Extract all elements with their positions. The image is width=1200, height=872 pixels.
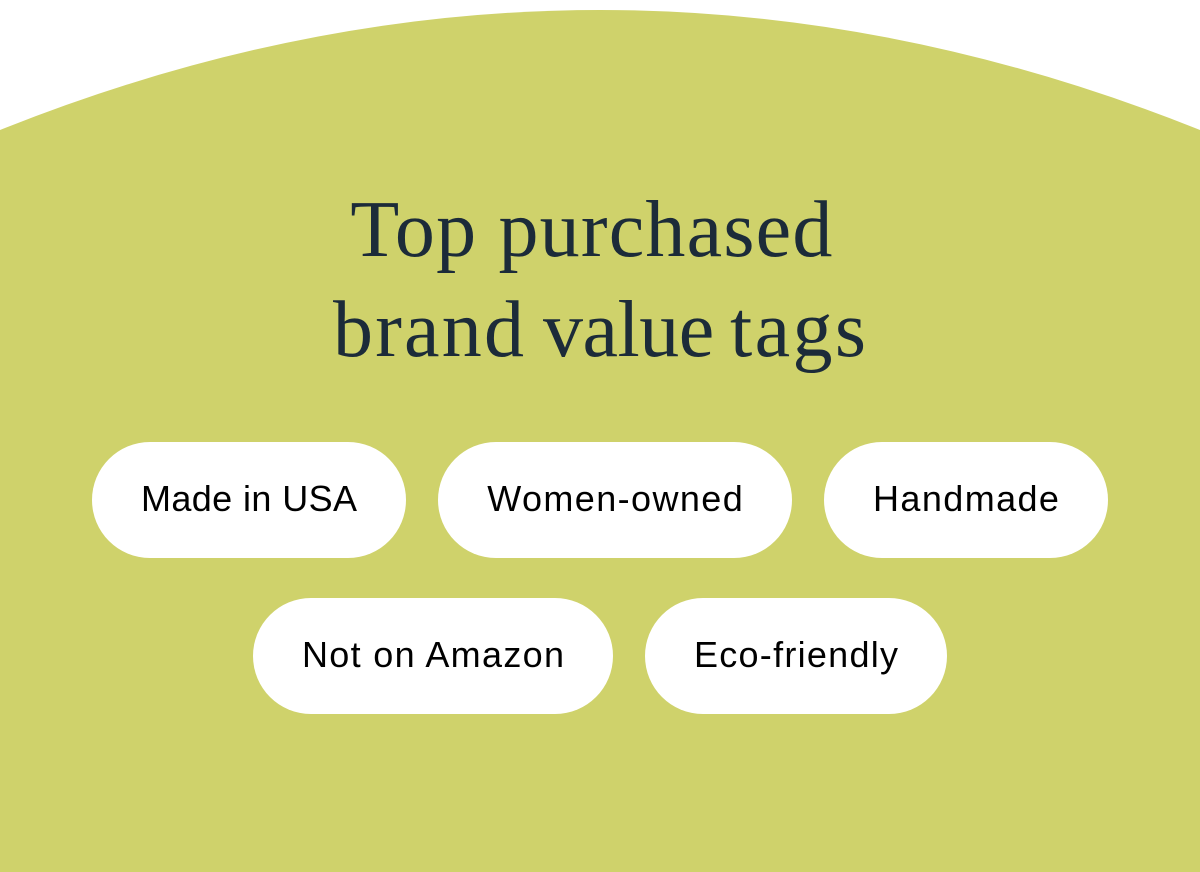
tag: Handmade: Handmade <box>873 478 1060 519</box>
tag: Not on Amazon <box>253 598 613 714</box>
tag: Handmade <box>824 442 1108 558</box>
tag: Not on Amazon: Not on Amazon <box>302 634 565 675</box>
heading: Top purchased <box>350 186 834 274</box>
tag: Eco-friendly: Eco-friendly <box>694 634 899 675</box>
heading: brand <box>333 286 526 374</box>
tag: Eco-friendly <box>645 598 947 714</box>
tag: Made in USA <box>92 442 406 558</box>
tag: Women-owned <box>438 442 792 558</box>
tag: Made in USA: Made in USA <box>141 478 357 519</box>
tag: Women-owned: Women-owned <box>487 478 744 519</box>
heading: value <box>543 286 714 374</box>
heading: tags <box>730 286 868 374</box>
heading <box>333 186 868 374</box>
